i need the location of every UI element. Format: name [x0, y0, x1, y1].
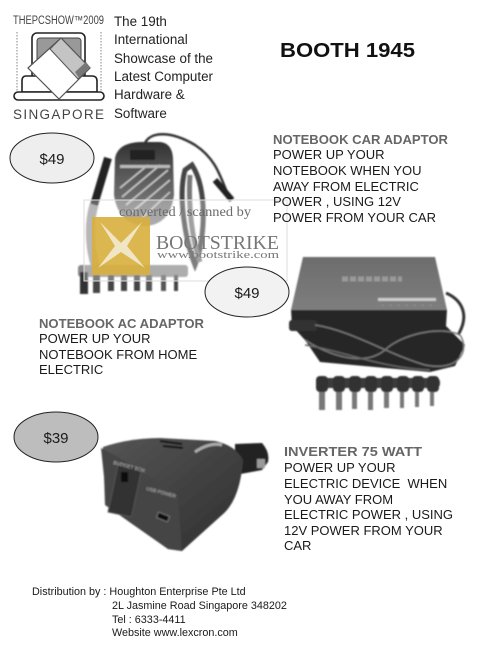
price badge: AC adaptor: $49 [234, 285, 260, 302]
watermark: converted / scanned by Bootstrike: converted / scanned by [119, 204, 251, 219]
intro text: Hardware & [114, 87, 185, 102]
logo: The PC Show 2009 Singapore [13, 15, 104, 122]
watermark: converted / scanned by Bootstrike [84, 200, 287, 281]
booth number: BOOTH 1945 [280, 40, 415, 62]
intro text: International [114, 32, 188, 47]
footer: distributor contact details: Website www.lexcron.com [112, 627, 238, 639]
price badge: car adaptor: $49 [39, 151, 65, 168]
text block: notebook car adaptor [273, 132, 449, 225]
price badge: inverter: $39 [43, 430, 69, 447]
footer: distributor contact details: Distribution by : Houghton Enterprise Pte Ltd [32, 586, 246, 598]
price badge: car adaptor [10, 133, 94, 183]
text block: notebook car adaptor: POWER UP YOUR [273, 147, 384, 162]
text block: notebook car adaptor: NOTEBOOK CAR ADAPTOR [273, 132, 449, 147]
intro text: Latest Computer [114, 69, 214, 84]
text block: notebook car adaptor: POWER , USING 12V [273, 194, 401, 209]
text block: notebook car adaptor: AWAY FROM ELECTRIC [273, 179, 419, 194]
text block: notebook AC adaptor: NOTEBOOK FROM HOME [39, 347, 198, 362]
text block: inverter 75 watt [284, 444, 453, 553]
text block: inverter 75 watt: INVERTER 75 WATT [284, 444, 422, 459]
product photo: inverter 75 watt: USB POWER [145, 486, 177, 500]
text block: notebook car adaptor: NOTEBOOK WHEN YOU [273, 163, 422, 178]
price badge: inverter [14, 412, 98, 462]
text block: inverter 75 watt: ELECTRIC POWER , USING [284, 507, 453, 522]
text block: notebook car adaptor: POWER FROM YOUR CAR [273, 210, 436, 225]
text block: inverter 75 watt: CAR [284, 538, 311, 553]
footer: distributor contact details: 2L Jasmine Road Singapore 348202 [112, 600, 287, 612]
footer: distributor contact details [32, 586, 287, 639]
intro text: The 19th [114, 14, 167, 29]
text block: notebook AC adaptor: ELECTRIC [39, 362, 103, 377]
text block: notebook AC adaptor [39, 316, 205, 377]
text block: inverter 75 watt: ELECTRIC DEVICE WHEN [284, 476, 447, 491]
product photo: inverter 75 watt [101, 438, 268, 551]
footer: distributor contact details: Tel : 6333-4411 [112, 614, 186, 626]
intro text: Software [114, 106, 167, 121]
text block: inverter 75 watt: YOU AWAY FROM [284, 492, 393, 507]
text block: notebook AC adaptor: POWER UP YOUR [39, 331, 150, 346]
price badge: AC adaptor [205, 267, 289, 317]
product photo: inverter 75 watt: BUDGET BOX [112, 460, 146, 475]
intro text [114, 14, 214, 121]
product photo: notebook car adaptor [78, 134, 232, 294]
watermark: converted / scanned by Bootstrike: BOOTSTRIKE [156, 232, 279, 254]
text block: inverter 75 watt: POWER UP YOUR [284, 460, 395, 475]
logo: The PC Show 2009 Singapore: SINGAPORE [13, 107, 104, 122]
watermark: converted / scanned by Bootstrike: www.bootstrike.com [157, 250, 279, 261]
intro text: Showcase of the [114, 51, 213, 66]
product photo: notebook AC adaptor [289, 257, 465, 410]
text block: inverter 75 watt: 12V POWER FROM YOUR [284, 523, 443, 538]
logo: The PC Show 2009 Singapore: THEPCSHOW™2009 [13, 15, 104, 27]
text block: notebook AC adaptor: NOTEBOOK AC ADAPTOR [39, 316, 205, 331]
